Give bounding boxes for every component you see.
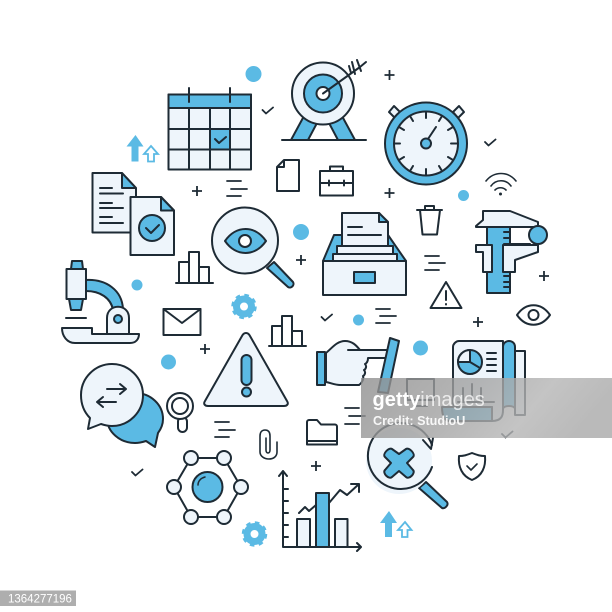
icon: small document	[277, 160, 299, 191]
icon: small bar chart left	[176, 252, 213, 283]
icon: target with arrow	[282, 60, 366, 140]
icon: upward arrows top left	[126, 135, 158, 162]
icon: folder	[307, 420, 337, 444]
watermark band	[361, 378, 612, 438]
icon: shield check	[459, 453, 485, 480]
plus signs	[192, 70, 549, 471]
check marks	[132, 108, 512, 476]
icon: magnifier with x	[366, 423, 448, 508]
icon: small bar chart right	[269, 316, 306, 346]
icon: growth bar chart	[279, 471, 361, 551]
icon: warning triangle small	[430, 282, 462, 308]
icon: small magnifier	[167, 393, 193, 432]
icon: speech bubbles	[81, 364, 163, 447]
icon: trash can	[417, 206, 442, 234]
three-line text marks	[215, 181, 445, 437]
icon: briefcase	[320, 166, 353, 196]
icon: magnifier with eye	[212, 208, 294, 288]
icon: filing drawer	[323, 213, 406, 295]
icon: pointing hand	[317, 338, 399, 393]
icon: warning triangle large	[204, 333, 288, 406]
icon: calendar	[168, 88, 251, 170]
watermark band: Credit: StudioU	[373, 414, 465, 428]
decorative blue dots	[132, 66, 469, 370]
icon: documents with check	[92, 173, 174, 255]
icon: gear lower	[244, 523, 266, 545]
icon: paperclip	[260, 430, 277, 459]
icon: box behind watermark	[407, 379, 434, 406]
icon: envelope	[164, 309, 200, 335]
image id label: 1364277196	[8, 594, 72, 606]
icon: caliper	[476, 211, 547, 293]
watermark band: gettyimages	[372, 389, 485, 411]
icon: wifi	[486, 174, 516, 196]
icon: eye outline	[517, 305, 550, 325]
image id label	[0, 590, 76, 606]
icon: gear upper	[233, 296, 255, 318]
icon: upward arrows bottom	[380, 511, 412, 537]
icon: microscope	[62, 261, 139, 343]
icon: report scroll	[442, 341, 525, 421]
icon: hexagon network	[167, 451, 248, 524]
icon: stopwatch	[385, 102, 467, 184]
